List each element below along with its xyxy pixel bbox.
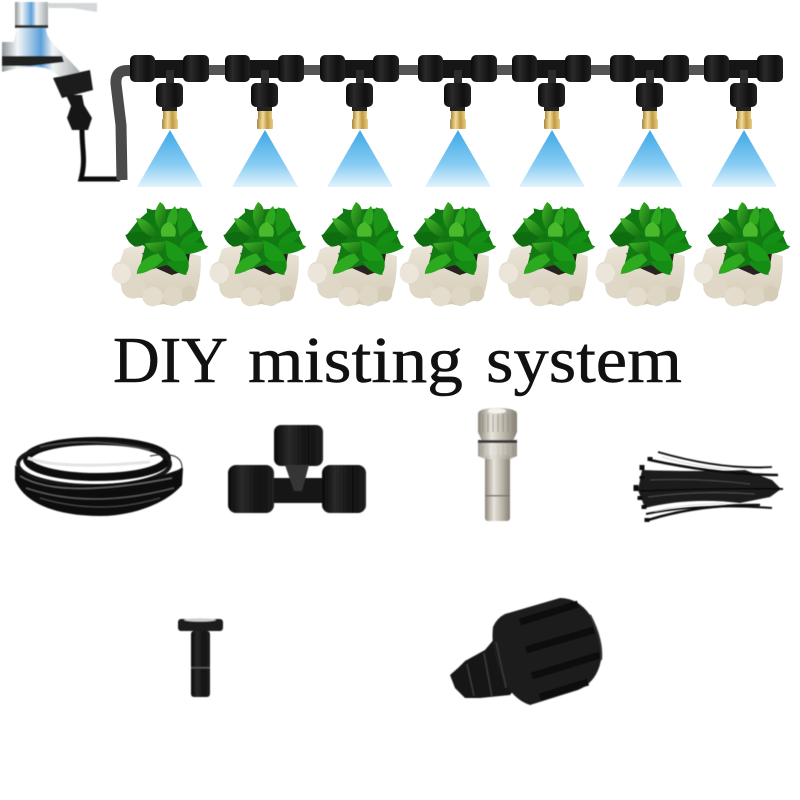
nozzle and spray 4 [418, 55, 497, 187]
title: system [486, 324, 682, 397]
succulent plant 1 [112, 202, 208, 306]
faucet with adapter [2, 2, 120, 179]
faucet chrome body [2, 2, 97, 78]
main pipe [128, 65, 748, 75]
title: DIY [113, 324, 228, 397]
part: tee connector [228, 425, 366, 513]
succulent plant 6 [596, 202, 692, 306]
nozzle and spray 2 [225, 55, 304, 187]
succulent plant 7 [694, 202, 790, 306]
title [113, 324, 682, 397]
succulent plant 3 [308, 202, 404, 306]
succulent plant 2 [210, 202, 306, 306]
nozzle and spray 7 [704, 55, 783, 187]
nozzle and spray 1 [130, 55, 209, 187]
nozzle and spray 3 [320, 55, 399, 187]
succulent plant 5 [499, 202, 595, 306]
quick connector [66, 95, 92, 130]
part: end plug [178, 618, 223, 697]
part: cable ties [636, 452, 783, 522]
elbow and riser pipe [116, 71, 132, 180]
part: faucet adapter [450, 598, 601, 705]
black hose from faucet [81, 130, 120, 179]
part: hose coil [15, 441, 183, 516]
threaded adapter on faucet [53, 70, 93, 98]
succulent plant 4 [400, 202, 496, 306]
nozzle and spray 6 [610, 55, 689, 187]
misting pipe [116, 65, 748, 180]
nozzle and spray 5 [512, 55, 591, 187]
part: mist nozzle [478, 408, 517, 521]
title: misting [248, 324, 463, 397]
